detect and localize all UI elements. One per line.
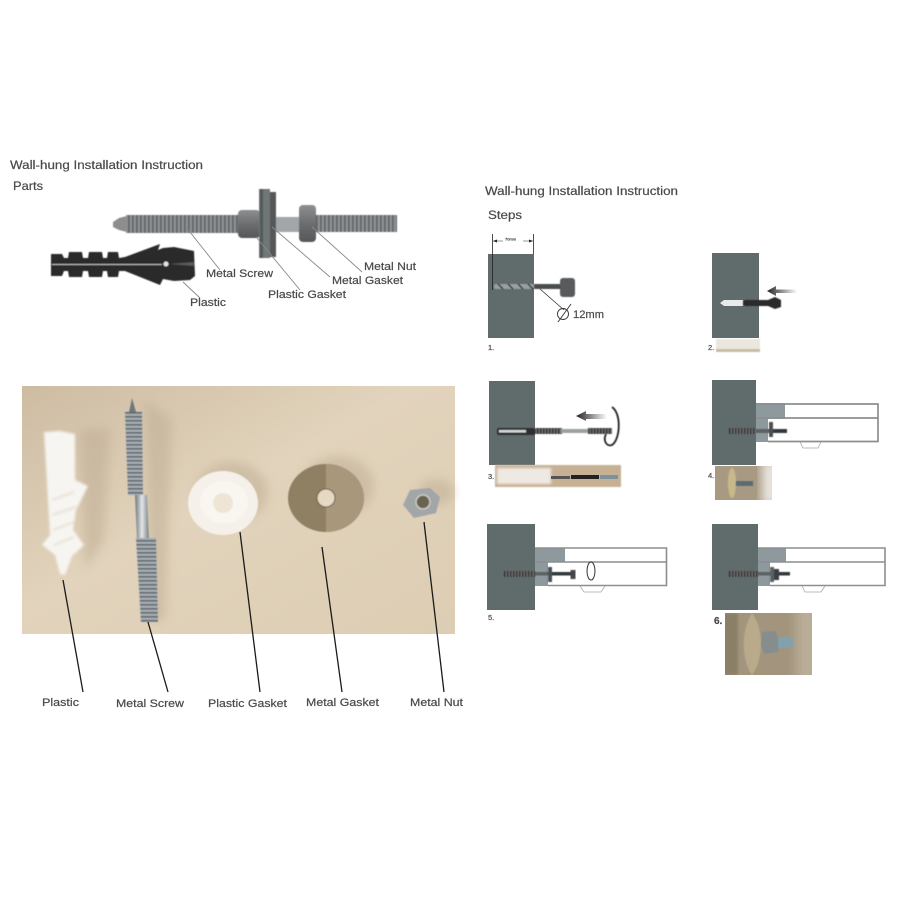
callout lines [63, 522, 444, 692]
title: parts page heading: Wall-hung Installation Instruction [10, 160, 203, 172]
leader lines [183, 227, 362, 298]
icon: plastic anchor [51, 244, 195, 285]
basin section [535, 548, 666, 592]
label: plastic: Plastic [42, 697, 80, 709]
wall [487, 524, 535, 610]
wall [712, 380, 756, 465]
icon: rotation arrow [605, 407, 619, 445]
step 5: add nut [487, 524, 666, 622]
basin section [756, 403, 878, 448]
depth dimension: 70mm [505, 236, 517, 242]
label: plastic: Plastic [190, 297, 227, 309]
photo: metal gasket [288, 464, 364, 532]
label: metal gasket: Metal Gasket [332, 275, 403, 287]
heading: steps: Steps [488, 210, 522, 222]
icon: anchor and screw [497, 428, 612, 435]
photo: anchor in wall [716, 339, 760, 352]
photo: fitted gasket [715, 466, 772, 500]
icon: arrow [767, 286, 797, 296]
photo: finished fixing [725, 613, 812, 675]
label: metal nut: Metal Nut [364, 261, 416, 273]
photo: screw in anchor [495, 465, 621, 487]
icon: nut [570, 570, 576, 579]
label: plastic gasket: Plastic Gasket [268, 289, 346, 301]
icon: anchor, gasket, nut and screw [729, 567, 790, 582]
icon: drill bit [494, 278, 575, 297]
step number: 4. [708, 471, 714, 480]
diagram: exploded parts [51, 189, 416, 309]
label: metal gasket: Metal Gasket [306, 697, 379, 709]
photo: plastic anchor [42, 431, 88, 575]
step 4: fit basin [708, 380, 878, 506]
step 2: insert anchor [708, 253, 797, 352]
step 3: screw in [488, 381, 621, 487]
step number: 1. [488, 343, 494, 352]
hole [720, 300, 745, 306]
diameter callout: 12mm [573, 309, 604, 321]
step 6: tighten nut [712, 524, 886, 675]
wall [712, 524, 758, 610]
icon: metal screw assembly [113, 189, 397, 258]
label: metal nut: Metal Nut [410, 697, 463, 709]
step number: 6. [714, 616, 723, 627]
step number: 3. [488, 472, 494, 481]
wall [488, 254, 534, 338]
photo: metal nut [403, 488, 440, 518]
icon: rotation ring [587, 562, 595, 580]
label: metal screw: Metal Screw [206, 268, 273, 280]
step 1: drill hole [488, 234, 604, 352]
photo background [22, 386, 455, 634]
icon: anchor [743, 297, 781, 309]
wall [712, 253, 759, 338]
shadows [80, 400, 454, 622]
heading: parts: Parts [13, 181, 43, 193]
label: metal screw: Metal Screw [116, 698, 184, 710]
icon: anchor, gasket and screw [729, 422, 787, 437]
photo: parts laid out [22, 386, 463, 710]
basin section [758, 548, 885, 592]
step number: 2. [708, 343, 714, 352]
icon: arrow [576, 411, 607, 421]
step number: 5. [488, 613, 494, 622]
wall [489, 381, 535, 465]
title: steps page heading: Wall-hung Installation Instruction [485, 186, 678, 198]
photo: metal screw [125, 398, 158, 622]
photo: plastic gasket [188, 471, 258, 535]
icon: anchor, gasket and screw [504, 567, 573, 582]
label: plastic gasket: Plastic Gasket [208, 698, 287, 710]
